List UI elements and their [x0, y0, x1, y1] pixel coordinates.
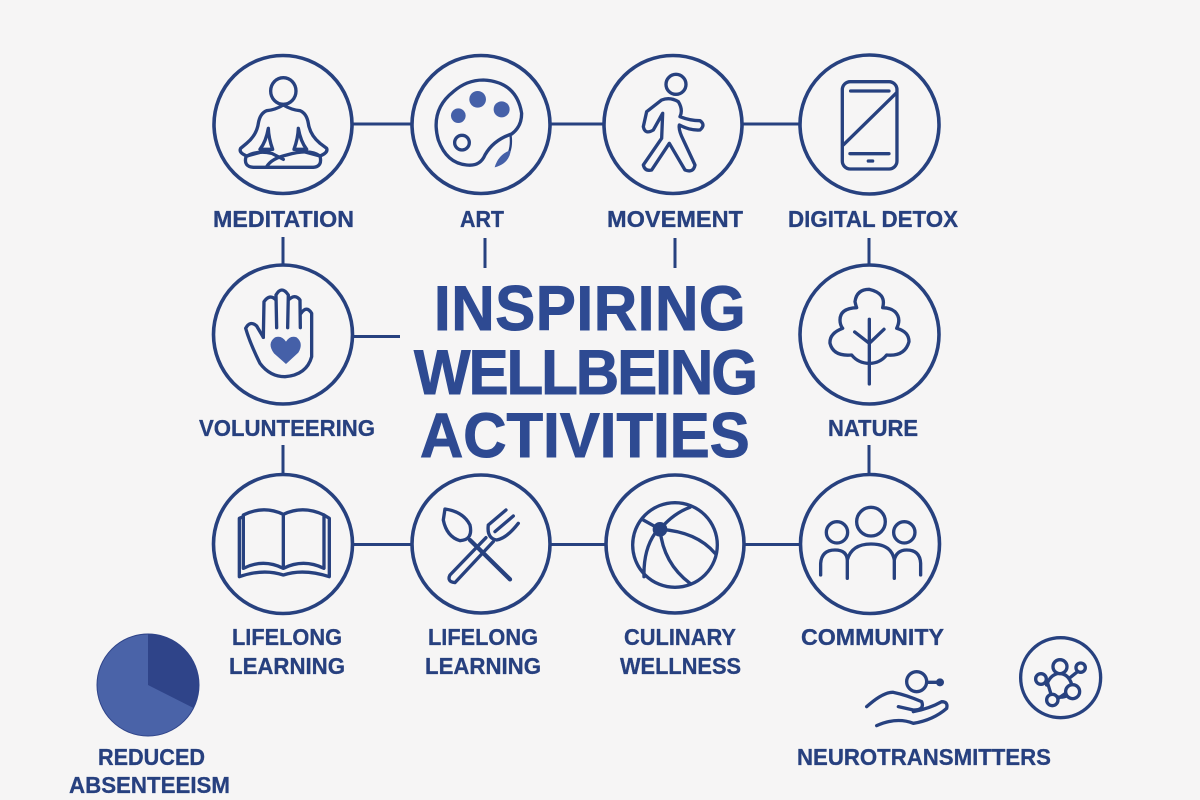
pie chart	[97, 634, 199, 736]
label: digital detox: DIGITAL DETOX	[788, 206, 959, 232]
icon: hand holding molecule	[867, 672, 947, 726]
icon: meditating person	[240, 78, 327, 167]
title: ACTIVITIES	[420, 401, 750, 471]
node: lifelong learning book	[214, 474, 352, 614]
connector lines	[283, 124, 869, 544]
node: nature	[800, 265, 939, 404]
label: art: ART	[460, 206, 504, 232]
label: culinary wellness: CULINARY	[624, 624, 736, 650]
title	[414, 274, 758, 471]
node: volunteering	[214, 265, 352, 404]
label: meditation: MEDITATION	[213, 206, 354, 232]
label: reduced absenteeism: REDUCED	[98, 744, 205, 770]
title: INSPIRING	[434, 274, 746, 344]
node: beach ball	[606, 475, 744, 613]
label: lifelong learning 2: LEARNING	[425, 653, 541, 679]
icon: hand with heart	[246, 290, 312, 377]
label: neurotransmitters: NEUROTRANSMITTERS	[797, 744, 1051, 770]
icon: molecule network in circle	[1021, 638, 1101, 718]
node: digital detox	[800, 55, 939, 194]
label: lifelong learning 2: LIFELONG	[428, 624, 538, 650]
node: movement	[604, 56, 742, 194]
icon: walking person	[643, 74, 703, 171]
label: nature: NATURE	[828, 415, 918, 441]
label: lifelong learning 1: LEARNING	[229, 653, 345, 679]
label: culinary wellness: WELLNESS	[620, 653, 741, 679]
label: lifelong learning 2	[425, 624, 541, 679]
node: art	[412, 56, 550, 194]
icon: spoon and fork	[443, 509, 518, 583]
icon: three people	[821, 507, 921, 578]
icon: beach ball	[633, 503, 717, 587]
label: culinary wellness	[620, 624, 741, 679]
label: reduced absenteeism	[69, 744, 230, 798]
label: volunteering: VOLUNTEERING	[199, 415, 375, 441]
label: lifelong learning 1	[229, 624, 345, 679]
title: WELLBEING	[414, 338, 758, 408]
icon: tree	[830, 289, 909, 384]
node: meditation	[214, 56, 352, 194]
label: reduced absenteeism: ABSENTEEISM	[69, 772, 230, 798]
node: utensils	[412, 475, 550, 613]
label: lifelong learning 1: LIFELONG	[232, 624, 342, 650]
node: community	[800, 474, 940, 614]
icon: open book	[239, 510, 329, 577]
label: community: COMMUNITY	[801, 624, 944, 650]
icon: paint palette	[436, 80, 522, 167]
label: movement: MOVEMENT	[607, 206, 743, 232]
icon: crossed-out phone	[842, 82, 897, 169]
